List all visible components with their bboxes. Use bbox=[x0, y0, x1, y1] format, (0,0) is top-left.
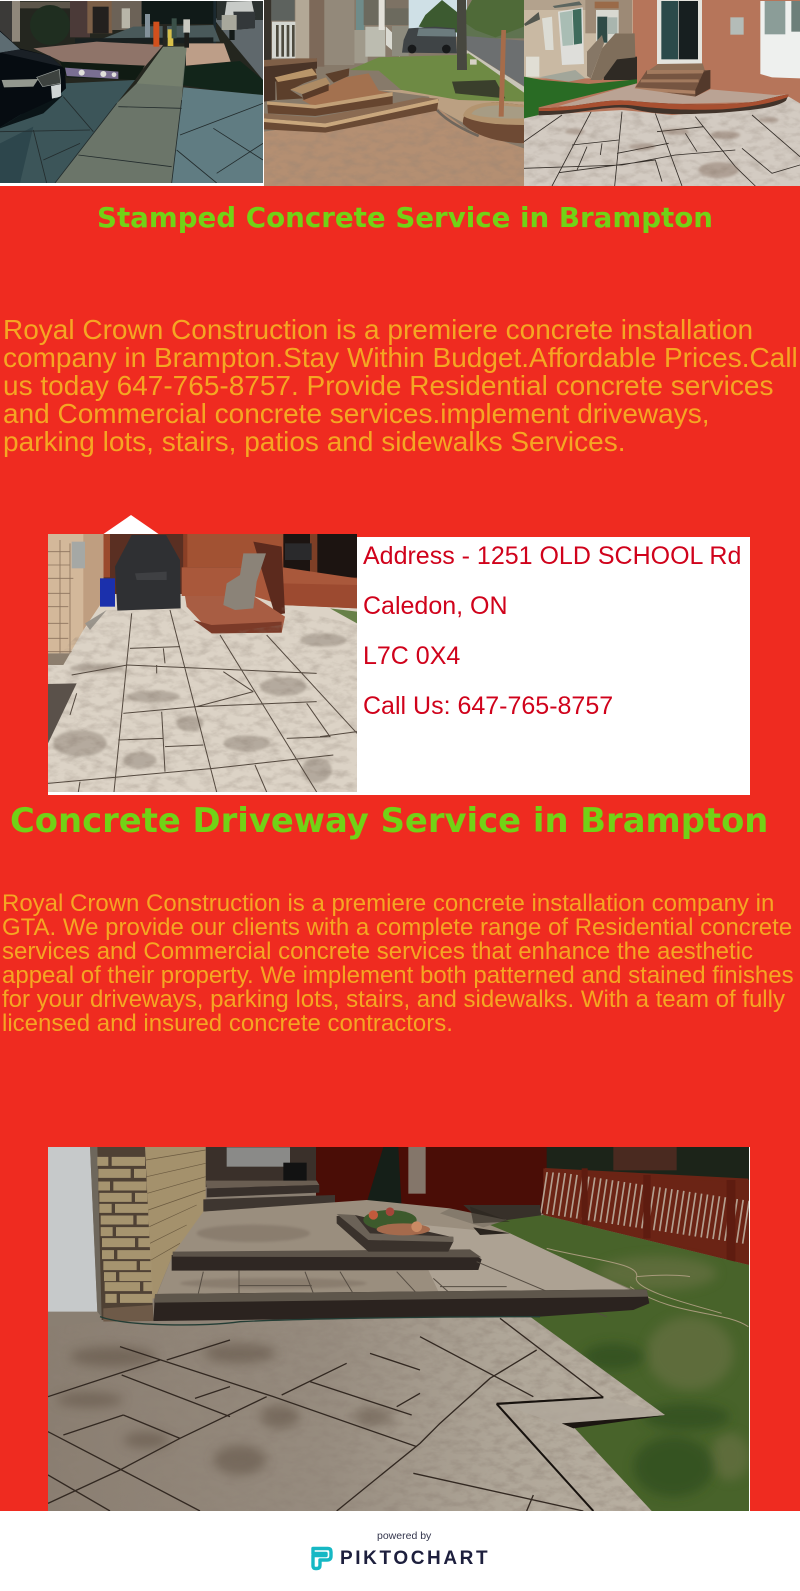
text block: driveway paragraph: licensed and insured concrete contractors. bbox=[2, 1010, 453, 1037]
text block: address and phone: Address - 1251 OLD SCHOOL Rd bbox=[363, 542, 741, 570]
text block: intro paragraph: us today 647-765-8757. Provide Residential concrete services bbox=[3, 370, 773, 401]
text: powered by: powered by bbox=[377, 1530, 431, 1542]
text block: intro paragraph: and Commercial concrete services.implement driveways, bbox=[3, 398, 709, 429]
text block: driveway paragraph: Royal Crown Construction is a premiere concrete installation company in bbox=[2, 890, 774, 917]
text block: intro paragraph: company in Brampton.Stay Within Budget.Affordable Prices.Call bbox=[3, 342, 798, 373]
text block: driveway paragraph: services and Commercial concrete services that enhance the aesthetic bbox=[2, 938, 753, 965]
panel: address card bbox=[48, 537, 750, 795]
icon: white triangle above photo bbox=[104, 515, 158, 534]
photo: patio with curved curb and brick house bbox=[524, 0, 800, 186]
photo: patio with deck and covered grill bbox=[48, 534, 357, 792]
text: piktochart wordmark: PIKTOCHART bbox=[340, 1548, 490, 1569]
text block: driveway paragraph: for your driveways, parking lots, stairs, and sidewalks. With a team of fully bbox=[2, 986, 785, 1013]
icon: piktochart logo bbox=[311, 1546, 333, 1570]
photo: stamped concrete driveway with steps, planter and fence bbox=[48, 1147, 749, 1511]
text block: address and phone bbox=[363, 542, 741, 720]
footer: powered by piktochart bbox=[0, 1511, 800, 1591]
photo: stamped concrete steps and planter ring bbox=[264, 0, 524, 186]
text block: driveway paragraph: appeal of their property. We implement both patterned and stained finishes bbox=[2, 962, 794, 989]
text block: driveway paragraph: GTA. We provide our clients with a complete range of Residential concrete bbox=[2, 914, 792, 941]
text block: intro paragraph: parking lots, stairs, patios and sidewalks Services. bbox=[3, 426, 626, 457]
text block: address and phone: Caledon, ON bbox=[363, 592, 508, 620]
title: stamped concrete service: Stamped Concrete Service in Brampton bbox=[97, 201, 713, 234]
text block: intro paragraph bbox=[3, 314, 798, 457]
text block: address and phone: Call Us: 647-765-8757 bbox=[363, 692, 613, 720]
text block: driveway paragraph bbox=[2, 890, 794, 1037]
photo: stamped driveway with dark car and sidewalk bbox=[0, 1, 263, 183]
text block: address and phone: L7C 0X4 bbox=[363, 642, 460, 670]
heading: concrete driveway service: Concrete Driveway Service in Brampton bbox=[10, 801, 768, 840]
text block: intro paragraph: Royal Crown Construction is a premiere concrete installation bbox=[3, 314, 753, 345]
